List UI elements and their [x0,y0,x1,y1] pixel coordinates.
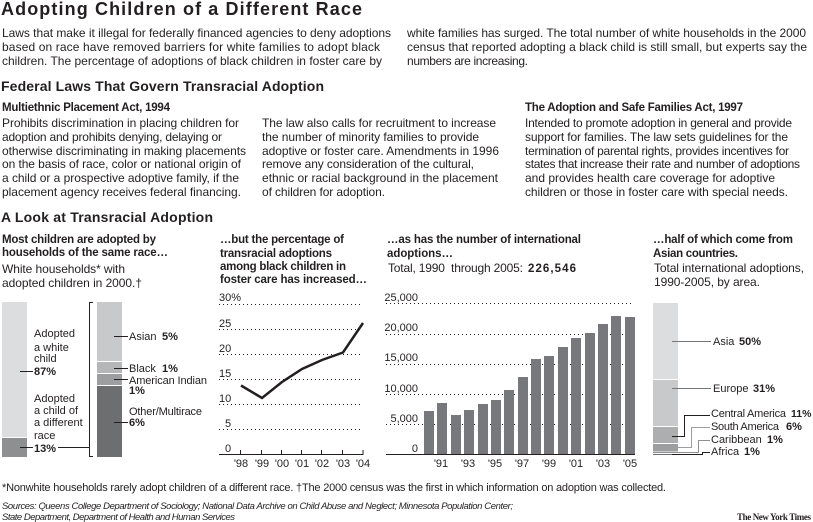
chart: line chart of transracial adoption percentage [219,292,370,470]
panel: Asian countries heading: …half of which come from [653,234,793,246]
intro text: children. The percentage of adoptions of black children in foster care by [2,54,382,68]
chart: line chart of transracial adoption percentage: '98 [234,458,248,470]
intro text: census that reported adopting a black child is still small, but experts say the [407,40,807,54]
chart: white households stacked bars: race [34,430,55,442]
chart: international adoptions bar chart: 10,000 [384,383,418,395]
chart: white households stacked bars: 1% [129,385,145,397]
panel: Multiethnic Placement Act: adoption and prohibits denying, delaying or [2,130,222,144]
chart: adoptions by area stacked bar: 50% [739,336,761,348]
chart: adoptions by area stacked bar: Asia [713,336,735,348]
chart: international adoptions bar chart: 25,000 [384,292,418,304]
chart: line chart of transracial adoption percentage: 15 [219,368,231,380]
chart: line chart of transracial adoption percentage: '03 [336,458,350,470]
chart: line chart of transracial adoption percentage: '99 [255,458,269,470]
credit: The New York Times: The New York Times [737,512,811,522]
chart: line chart of transracial adoption percentage: '01 [295,458,309,470]
chart: line chart of transracial adoption percentage: 20 [219,343,231,355]
chart: white households stacked bars: 13% [34,443,56,455]
panel: Asian countries heading: 1990-2005, by area. [654,275,760,289]
chart: white households stacked bars: Adopted [34,328,75,340]
sources: Sources: Queens College Department of Sociology; National Data Archive on Child Abuse and Neglect; Minnesota Population Center; [2,501,513,512]
chart: line chart of transracial adoption percentage: '00 [275,458,289,470]
chart: international adoptions bar chart: '93 [461,458,475,470]
panel: Asian countries heading [653,234,804,289]
intro text: Laws that make it illegal for federally financed agencies to deny adoptions [2,26,391,40]
chart: adoptions by area stacked bar: 1% [767,434,783,446]
chart: white households stacked bars: American Indian [129,375,207,387]
heading: a look at transracial adoption: A Look at Transracial Adoption [1,209,213,225]
chart: line chart of transracial adoption percentage: 30% [219,292,241,304]
panel: international adoptions heading: adoptions… [387,248,453,260]
chart: international adoptions bar chart: '03 [596,458,610,470]
chart: adoptions by area stacked bar: 6% [786,421,802,433]
panel: foster care heading [220,234,367,286]
chart: white households stacked bars: 5% [162,331,178,343]
chart: white households stacked bars: 87% [34,366,56,378]
panel: Multiethnic Placement Act: placement agency receives federal financing. [2,185,241,199]
chart: line chart of transracial adoption percentage: 0 [225,443,231,455]
chart: international adoptions bar chart: '01 [569,458,583,470]
panel: Multiethnic Placement Act: The law also calls for recruitment to increase [262,116,496,130]
chart: international adoptions bar chart: '95 [488,458,502,470]
panel: international adoptions heading: Total, 1990 through 2005: [388,261,523,275]
chart: white households stacked bars: Asian [129,331,157,343]
chart: line chart of transracial adoption percentage: '02 [315,458,329,470]
intro text: numbers are increasing. [407,54,528,68]
chart: adoptions by area stacked bar: 1% [744,446,760,458]
chart: adoptions by area stacked bar: Europe [713,383,748,395]
panel: Multiethnic Placement Act: a child or a prospective adoptive family, if the [2,171,239,185]
chart: international adoptions bar chart: 5,000 [390,413,418,425]
chart: adoptions by area stacked bar: Caribbean [711,434,762,446]
chart: international adoptions bar chart: '99 [542,458,556,470]
panel: Multiethnic Placement Act: remove any consideration of the cultural, [262,157,474,171]
footnote: *Nonwhite households rarely adopt children of a different race. †The 2000 census was the first in which information on adoption was collected. [2,482,666,494]
panel: Adoption and Safe Families Act: termination of parental rights, provides incentives for [525,144,789,158]
panel: Multiethnic Placement Act: ethnic or racial background in the placement [262,171,499,185]
chart: adoptions by area stacked bar: 31% [753,383,775,395]
panel: Multiethnic Placement Act: the number of minority families to provide [262,130,479,144]
chart: international adoptions bar chart: 20,000 [384,322,418,334]
chart: adoptions by area stacked bar: Africa [711,446,740,458]
chart: international adoptions bar chart: '05 [623,458,637,470]
chart: white households stacked bars: 6% [129,417,145,429]
panel: foster care heading: foster care has increased… [220,274,367,286]
chart: line chart of transracial adoption percentage: '04 [356,458,370,470]
chart: adoptions by area stacked bar: South America [711,421,780,433]
panel: foster care heading: …but the percentage of [220,234,344,246]
panel: Adoption and Safe Families Act: and provides health care coverage for adoptive [525,171,775,185]
panel: Adoption and Safe Families Act: states that increase their rate and number of adoptions [525,157,800,171]
panel: Asian countries heading: Total international adoptions, [654,261,804,275]
panel: same race heading: White households* with [2,262,125,276]
chart: white households stacked bars: a child of [34,405,79,417]
chart: line chart of transracial adoption percentage: 10 [219,393,231,405]
chart: line chart of transracial adoption percentage: 25 [219,318,231,330]
panel: foster care heading: transracial adoptions [220,248,332,260]
panel: Multiethnic Placement Act: Multiethnic Placement Act, 1994 [2,102,171,114]
panel: Adoption and Safe Families Act [525,102,800,199]
chart: line chart of transracial adoption percentage: 5 [225,418,231,430]
chart: adoptions by area stacked bar: Central America [711,408,787,420]
chart: adoptions by area stacked bar: 11% [791,408,812,420]
chart: international adoptions bar chart: '97 [515,458,529,470]
panel: same race heading: adopted children in 2000.† [2,276,142,290]
panel: same race heading: households of the same race… [2,247,168,259]
chart: white households stacked bars: Other/Multirace [129,406,202,418]
panel: Multiethnic Placement Act [2,102,499,199]
panel: same race heading: Most children are adopted by [2,234,157,246]
chart: white households stacked bars: child [34,353,57,365]
chart: white households stacked bars [2,302,207,457]
chart: adoptions by area stacked bar [653,303,812,458]
panel: Asian countries heading: Asian countries. [653,248,738,260]
panel: Adoption and Safe Families Act: Intended to promote adoption in general and provide [525,116,792,130]
panel: international adoptions heading: …as has the number of international [387,234,581,246]
panel: same race heading [2,234,168,290]
intro text: white families has surged. The total number of white households in the 2000 [406,26,806,40]
panel: Multiethnic Placement Act: Prohibits discrimination in placing children for [2,116,239,130]
chart: white households stacked bars: a white [34,342,69,354]
intro text: based on race have removed barriers for white families to adopt black [2,40,381,54]
heading: federal laws: Federal Laws That Govern Transracial Adoption [1,78,324,94]
chart: white households stacked bars: a different [34,417,83,429]
panel: international adoptions heading: 226,546 [528,263,576,275]
chart: white households stacked bars: Black [129,363,156,375]
chart: international adoptions bar chart: '91 [434,458,448,470]
chart: white households stacked bars: 1% [162,363,178,375]
panel: Multiethnic Placement Act: of children for adoption. [262,185,385,199]
chart: international adoptions bar chart [384,292,637,470]
panel: Adoption and Safe Families Act: support for families. The law sets guidelines for the [525,130,788,144]
panel: Adoption and Safe Families Act: children or those in foster care with special needs. [525,185,788,199]
panel: foster care heading: among black children in [220,261,346,273]
intro text [2,26,807,68]
panel: Multiethnic Placement Act: otherwise discriminating in making placements [2,144,246,158]
panel: international adoptions heading [387,234,581,275]
chart: international adoptions bar chart: 0 [412,443,418,455]
panel: Multiethnic Placement Act: adoptive or foster care. Amendments in 1996 [262,144,499,158]
chart: white households stacked bars: Adopted [34,393,75,405]
chart: international adoptions bar chart: 15,000 [384,352,418,364]
panel: Multiethnic Placement Act: on the basis of race, color or national origin of [2,157,242,171]
sources [2,501,513,522]
panel: Adoption and Safe Families Act: The Adoption and Safe Families Act, 1997 [525,102,743,114]
